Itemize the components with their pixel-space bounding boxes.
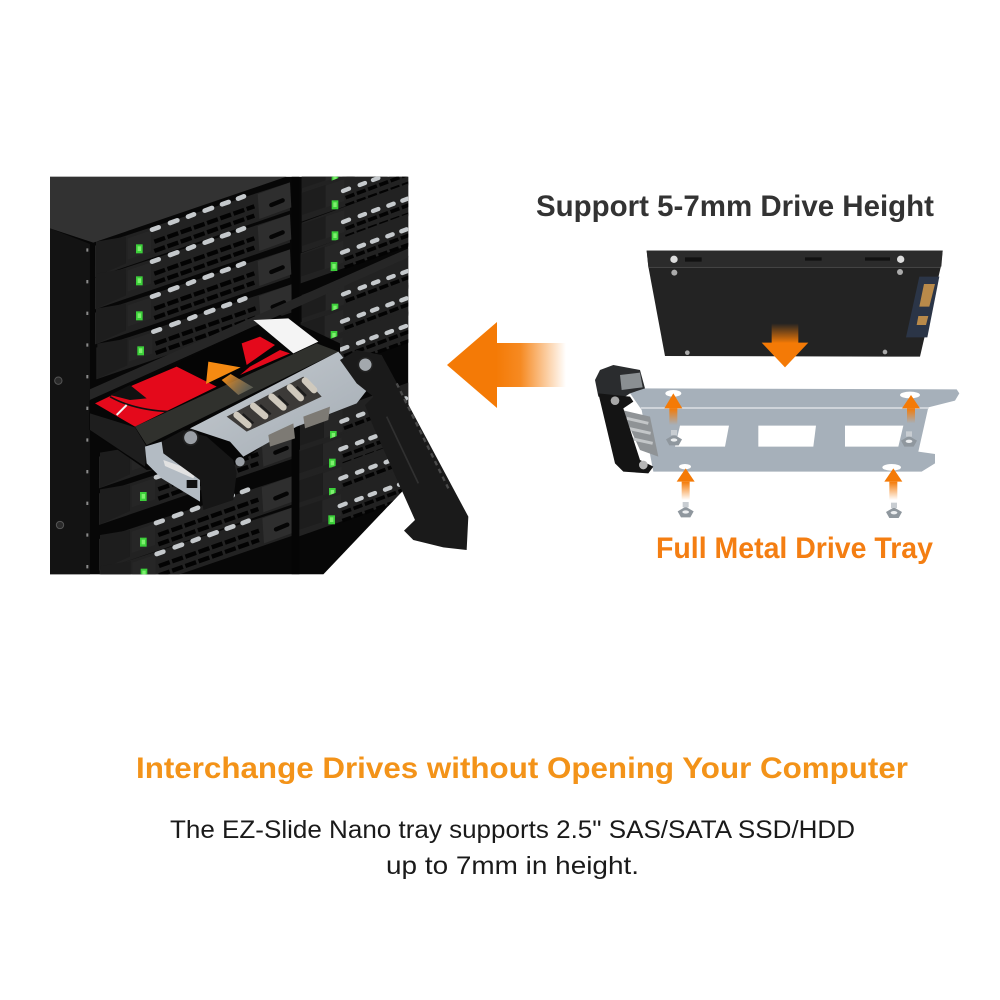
open drive bay (89, 315, 340, 470)
chassis side face (50, 228, 90, 574)
SSD drive (647, 251, 943, 357)
arrow: large orange left arrow (447, 322, 566, 408)
chassis top face (50, 177, 287, 243)
heading: Interchange Drives without Opening Your Computer: Interchange Drives without Opening Your Computer (136, 752, 908, 785)
heading: Support 5-7mm Drive Height: Support 5-7mm Drive Height (536, 190, 934, 223)
icon: small orange arrow on drive (206, 362, 253, 395)
arrows: up to screw holes (664, 393, 920, 500)
body text: The EZ-Slide Nano tray supports 2.5" SAS/SATA SSD/HDD (170, 816, 855, 844)
left latch block (162, 430, 237, 510)
drive label: black base (95, 327, 297, 427)
metal tray (627, 388, 959, 472)
lower silver tray lip (145, 442, 200, 502)
drive label: red (95, 367, 217, 427)
drive label: white (253, 318, 318, 353)
tray handle (595, 365, 658, 473)
tray strap (135, 343, 338, 445)
chassis front background (50, 177, 410, 577)
caption: Full Metal Drive Tray: Full Metal Drive Tray (656, 532, 933, 565)
body text: up to 7mm in height. (386, 852, 639, 880)
spring latch (227, 377, 322, 432)
tray metal front (190, 352, 368, 457)
arrow: down into tray (762, 323, 808, 367)
ejector lever (340, 350, 468, 550)
screws (666, 430, 917, 518)
body text (170, 816, 855, 880)
photo: server chassis with drive tray pulled out (50, 176, 468, 574)
shelf divider (88, 248, 408, 401)
photo: SSD and metal drive tray (595, 251, 959, 518)
